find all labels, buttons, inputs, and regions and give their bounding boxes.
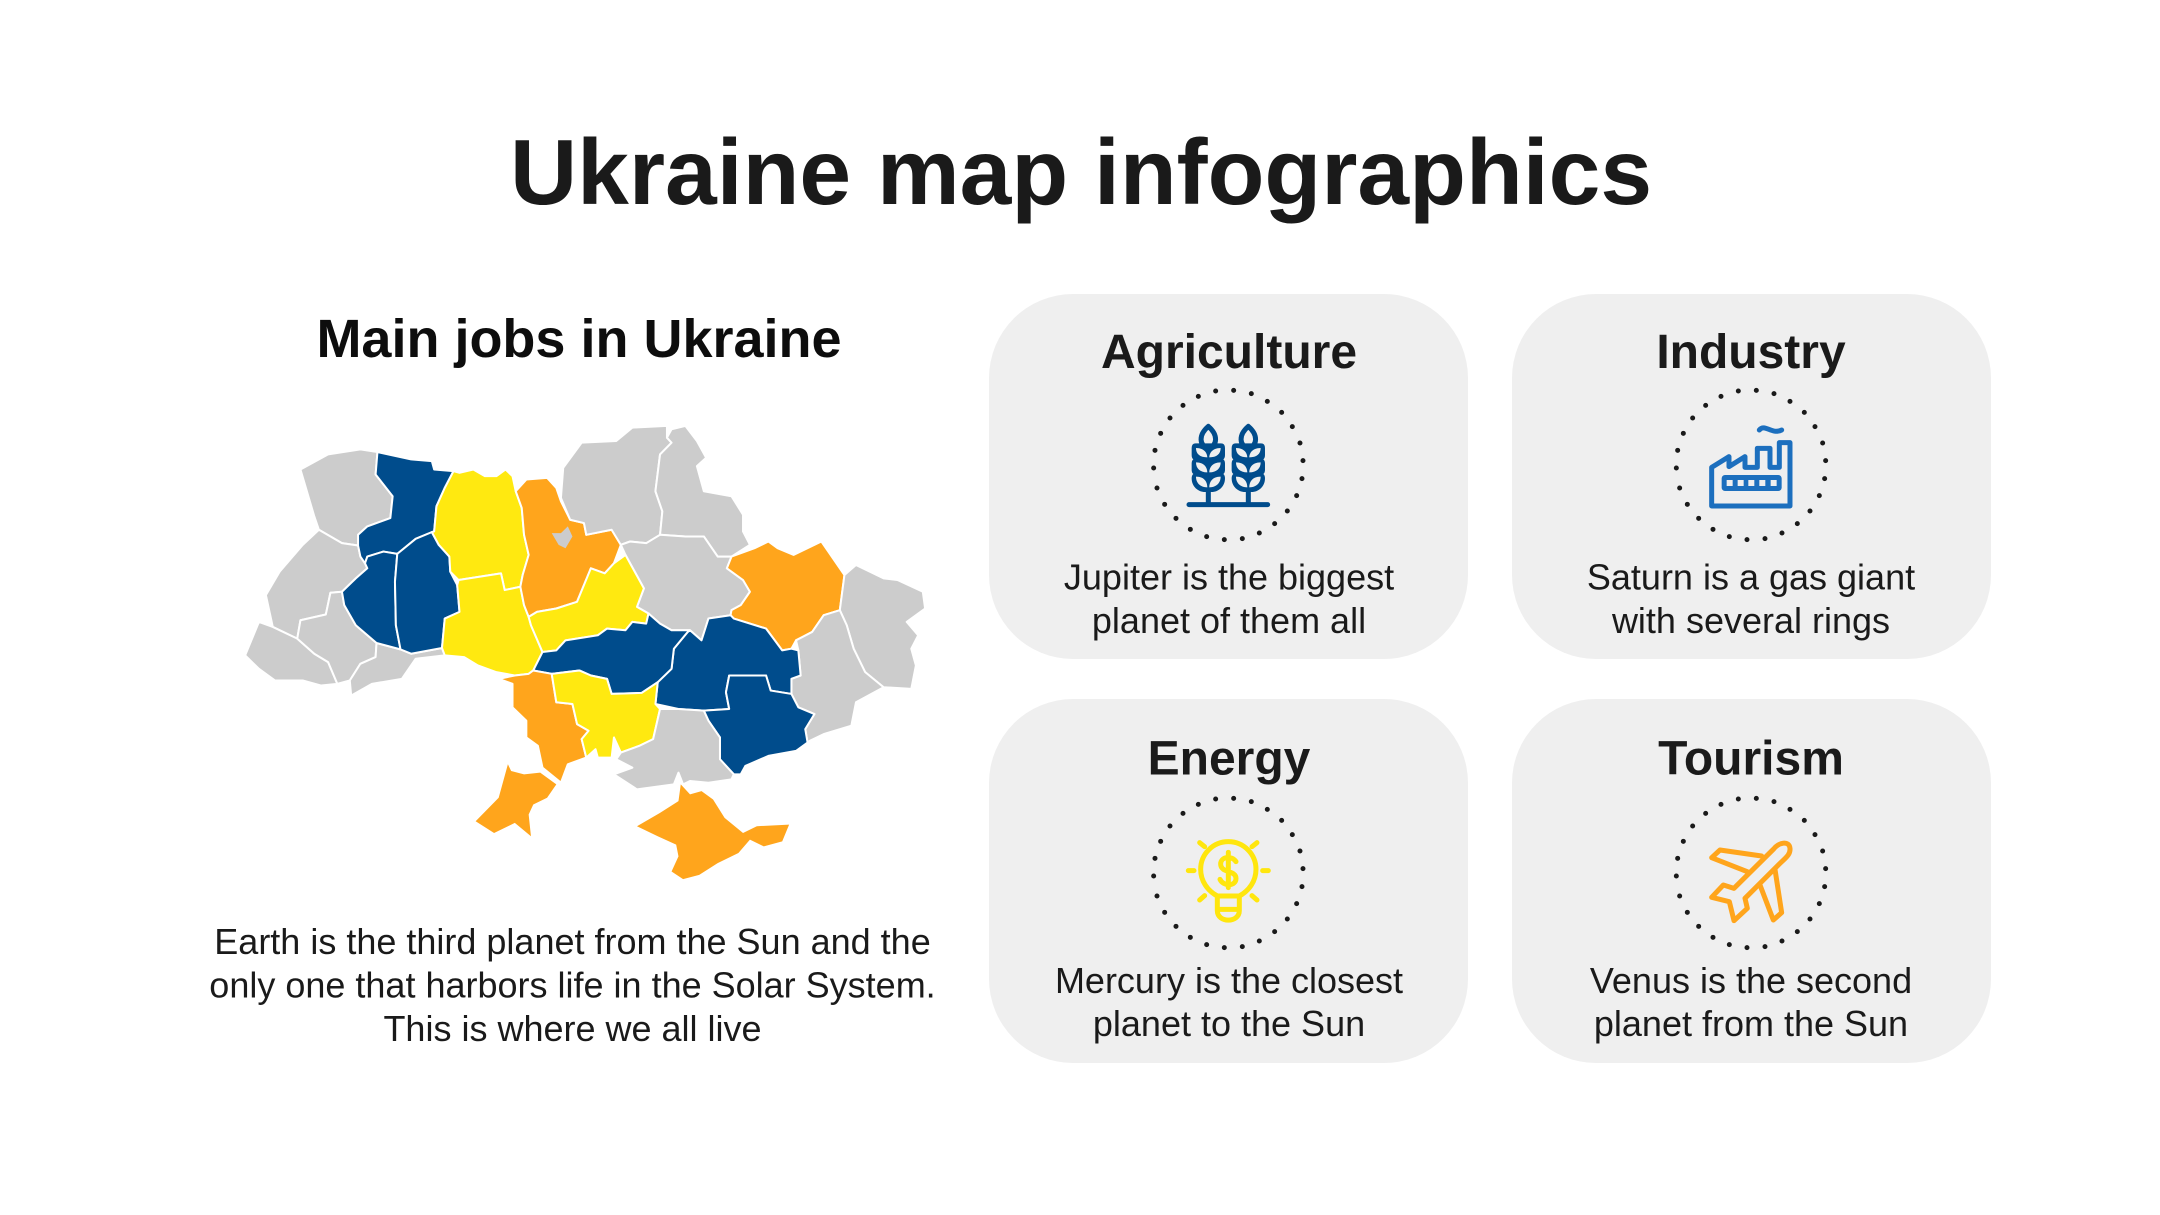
icon: light bulb in dotted circle bbox=[1154, 798, 1303, 948]
panel: agriculture bbox=[989, 294, 1468, 659]
panel: main jobs map bbox=[209, 309, 936, 1049]
title: Ukraine map infographics bbox=[510, 120, 1652, 224]
description: agriculture: Jupiter is the biggest bbox=[1064, 556, 1394, 598]
icon: factory in dotted circle bbox=[1676, 390, 1826, 540]
heading: tourism: Tourism bbox=[1658, 732, 1844, 786]
map of Ukraine bbox=[245, 426, 925, 879]
icon: airplane in dotted circle bbox=[1676, 798, 1826, 948]
panel: tourism bbox=[1512, 699, 1991, 1063]
heading: industry: Industry bbox=[1656, 326, 1846, 379]
description: tourism: Venus is the second bbox=[1590, 960, 1912, 1001]
map description: only one that harbors life in the Solar System. bbox=[209, 965, 936, 1006]
description: tourism: planet from the Sun bbox=[1594, 1003, 1908, 1044]
heading: energy: Energy bbox=[1148, 732, 1311, 786]
map description: This is where we all live bbox=[383, 1008, 762, 1049]
description: energy: planet to the Sun bbox=[1093, 1003, 1365, 1044]
description: industry: with several rings bbox=[1611, 600, 1890, 641]
panel: industry bbox=[1512, 294, 1991, 659]
description: energy: Mercury is the closest bbox=[1055, 960, 1403, 1001]
icon: wheat in dotted circle bbox=[1154, 390, 1303, 540]
panel: energy bbox=[989, 699, 1468, 1063]
description: industry: Saturn is a gas giant bbox=[1587, 556, 1915, 598]
heading: agriculture: Agriculture bbox=[1101, 326, 1357, 379]
map heading: Main jobs in Ukraine bbox=[316, 309, 842, 369]
description: agriculture: planet of them all bbox=[1092, 600, 1366, 641]
map description: Earth is the third planet from the Sun and the bbox=[214, 921, 931, 962]
